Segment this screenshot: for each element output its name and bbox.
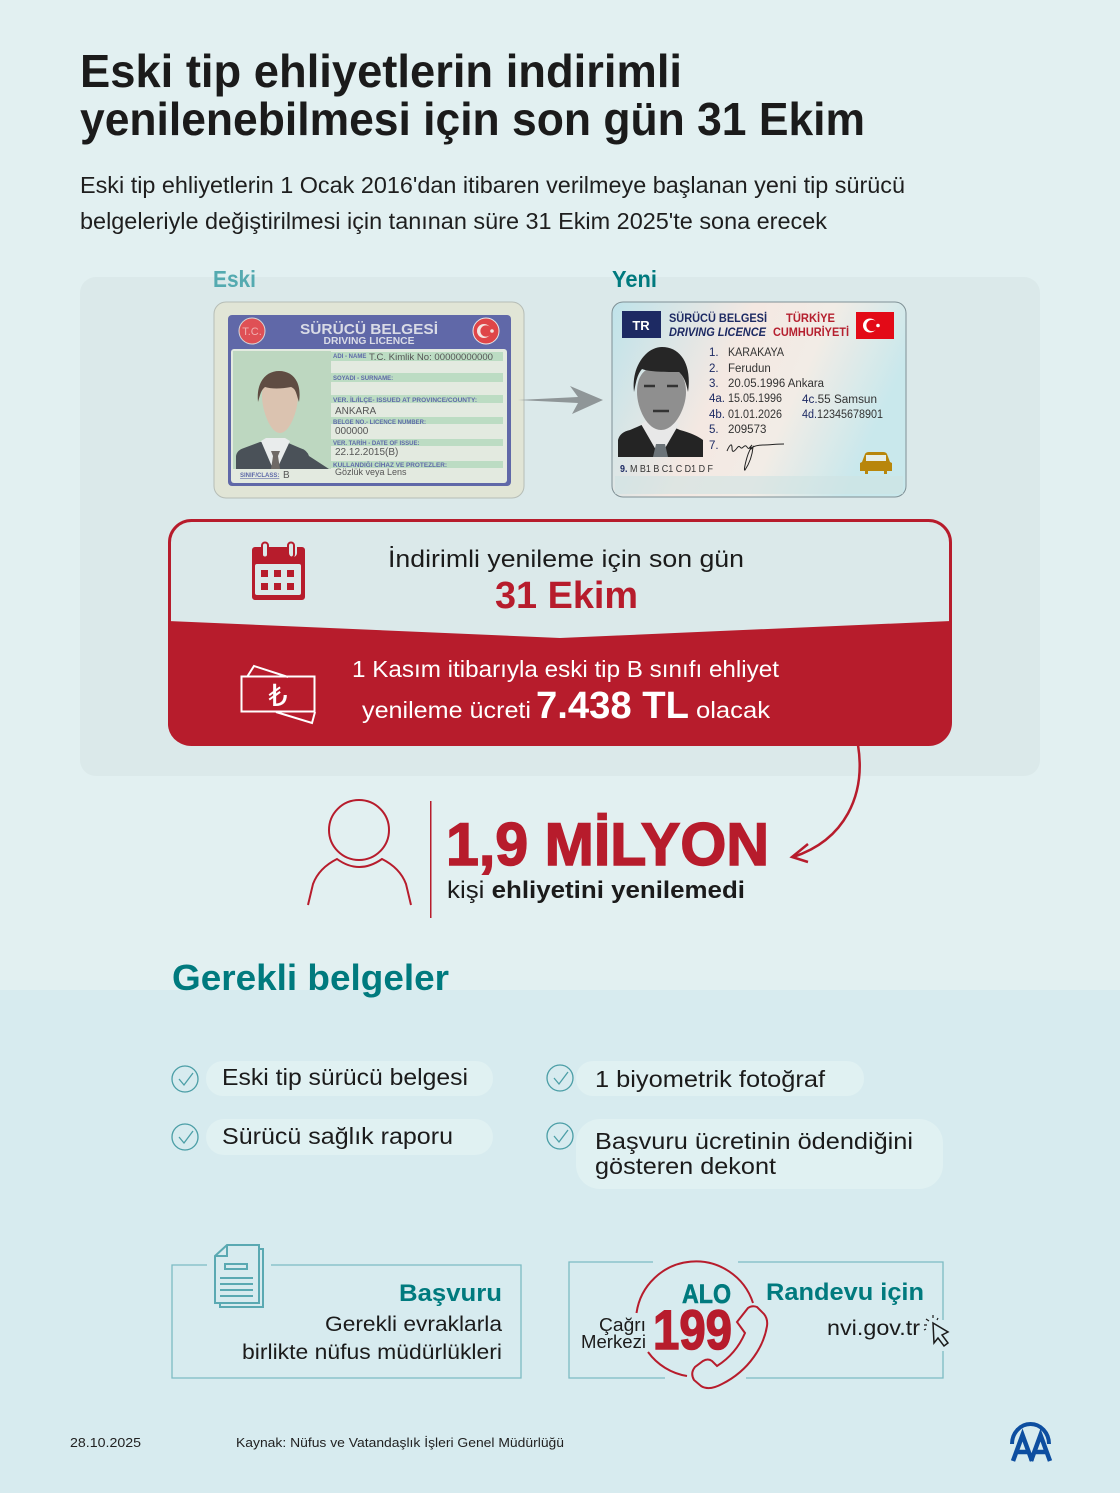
panel: call centre (569, 1261, 948, 1388)
subtitle: belgeleriyle değiştirilmesi için tanınan süre 31 Ekim 2025'te sona erecek (80, 208, 827, 234)
panel: licence comparison (80, 277, 1040, 776)
panel: application: Başvuru (399, 1280, 502, 1307)
new licence card: 3. (709, 378, 719, 390)
subtitle (80, 172, 905, 234)
old licence card: ANKARA (335, 406, 376, 417)
new licence card: 20.05.1996 Ankara (728, 378, 825, 390)
new licence card: 1. (709, 347, 719, 359)
list: required documents (172, 1061, 943, 1189)
new licence card: 4d.12345678901 (802, 409, 883, 421)
icon: calendar (252, 542, 305, 600)
panel: deadline (168, 520, 951, 745)
new licence card: 2. (709, 363, 719, 375)
old licence card (214, 302, 524, 498)
renewal fee text: olacak (696, 697, 771, 723)
panel: application: birlikte nüfus müdürlükleri (242, 1341, 502, 1364)
label: appointment: Randevu için (766, 1279, 924, 1306)
title: yenilenebilmesi için son gün 31 Ekim (80, 93, 865, 145)
title: Eski tip ehliyetlerin indirimli (80, 45, 682, 97)
new licence card: Ferudun (728, 363, 771, 375)
new licence card: 4a. (709, 393, 725, 405)
list: required documents: gösteren dekont (595, 1153, 777, 1179)
old licence card: VER. TARİH - DATE OF ISSUE: (333, 440, 419, 447)
title (80, 45, 865, 145)
new licence card: TR (632, 318, 650, 333)
alo: ALO (682, 1279, 731, 1309)
list: required documents: Sürücü sağlık raporu (222, 1123, 453, 1149)
icon: cursor (924, 1315, 948, 1346)
new licence card: CUMHURİYETİ (773, 324, 849, 339)
new licence card: KARAKAYA (728, 347, 784, 359)
panel: application (172, 1245, 521, 1378)
old licence card: DRIVING LICENCE (324, 336, 415, 347)
new licence card: TÜRKİYE (786, 310, 835, 325)
new licence card: 209573 (728, 424, 766, 436)
new licence card: SÜRÜCÜ BELGESİ (669, 310, 767, 325)
panel: application: Gerekli evraklarla (325, 1313, 502, 1336)
old licence card: VER. İL/İLÇE- ISSUED AT PROVINCE/COUNTY: (333, 397, 477, 404)
list: required documents: Başvuru ücretinin ödendiğini (595, 1128, 913, 1154)
deadline date: 31 Ekim (495, 575, 638, 617)
list: required documents: Eski tip sürücü belgesi (222, 1064, 468, 1090)
old licence card: T.C. Kimlik No: 00000000000 (369, 352, 493, 362)
new licence card: 01.01.2026 (728, 409, 782, 421)
old licence card: SOYADI - SURNAME: (333, 376, 393, 382)
arrow: old to new (518, 386, 603, 414)
new licence card: 5. (709, 424, 719, 436)
old licence card: Gözlük veya Lens (335, 467, 407, 477)
logo: AA (1012, 1424, 1050, 1461)
arrow: to 1,9 milyon (792, 745, 860, 862)
heading: required documents: Gerekli belgeler (172, 957, 449, 998)
new licence card (612, 302, 906, 497)
old licence card: BELGE NO.- LICENCE NUMBER: (333, 420, 426, 426)
panel: call centre: Merkezi (581, 1332, 646, 1352)
statistic: 1,9 milyon: 1,9 MİLYON (446, 811, 769, 878)
old licence card: T.C. (242, 326, 262, 338)
renewal fee text: 1 Kasım itibarıyla eski tip B sınıfı ehliyet (352, 656, 780, 682)
199: 199 (653, 1298, 732, 1361)
renewal fee text: 7.438 TL (536, 685, 689, 727)
new licence card: 4b. (709, 409, 725, 421)
old licence card: SÜRÜCÜ BELGESİ (300, 321, 438, 338)
label: call centre: Çağrı (599, 1315, 646, 1335)
old licence card: B (283, 470, 290, 481)
panel: call centre: nvi.gov.tr (827, 1317, 920, 1340)
icon: phone (692, 1306, 767, 1388)
footer: date: 28.10.2025 (70, 1436, 141, 1450)
renewal fee text: yenileme ücreti (362, 697, 531, 723)
divider (430, 801, 432, 918)
list: required documents: 1 biyometrik fotoğraf (595, 1066, 826, 1092)
renewal fee text (352, 656, 780, 727)
new licence card: DRIVING LICENCE (669, 325, 767, 339)
icon: banknotes (242, 666, 315, 723)
statistic caption: kişi ehliyetini yenilemedi (447, 877, 745, 904)
footer: source: Kaynak: Nüfus ve Vatandaşlık İşleri Genel Müdürlüğü (236, 1436, 564, 1450)
red banner (168, 621, 951, 745)
icon: person (308, 800, 411, 905)
icon: document (215, 1245, 263, 1307)
heading: Yeni: Yeni (612, 266, 657, 292)
deadline text: İndirimli yenileme için son gün (388, 546, 744, 573)
new licence card: 7. (709, 440, 719, 452)
call centre ring (636, 1261, 753, 1376)
old licence card: 22.12.2015(B) (335, 447, 398, 458)
old licence card: KULLANDIĞI CİHAZ VE PROTEZLER: (333, 461, 447, 469)
old licence card: 000000 (335, 426, 369, 437)
new licence card: 15.05.1996 (728, 393, 782, 405)
old licence card: ADI - NAME (333, 354, 366, 360)
subtitle: Eski tip ehliyetlerin 1 Ocak 2016'dan itibaren verilmeye başlanan yeni tip sürücü (80, 172, 905, 198)
old licence card: SINIF/CLASS: (240, 473, 279, 479)
new licence card: 4c.55 Samsun (802, 394, 877, 406)
icon: banknotes: ₺ (268, 680, 288, 713)
heading: Eski: Eski (213, 266, 256, 292)
new licence card: 9. M B1 B C1 C D1 D F (620, 464, 713, 475)
